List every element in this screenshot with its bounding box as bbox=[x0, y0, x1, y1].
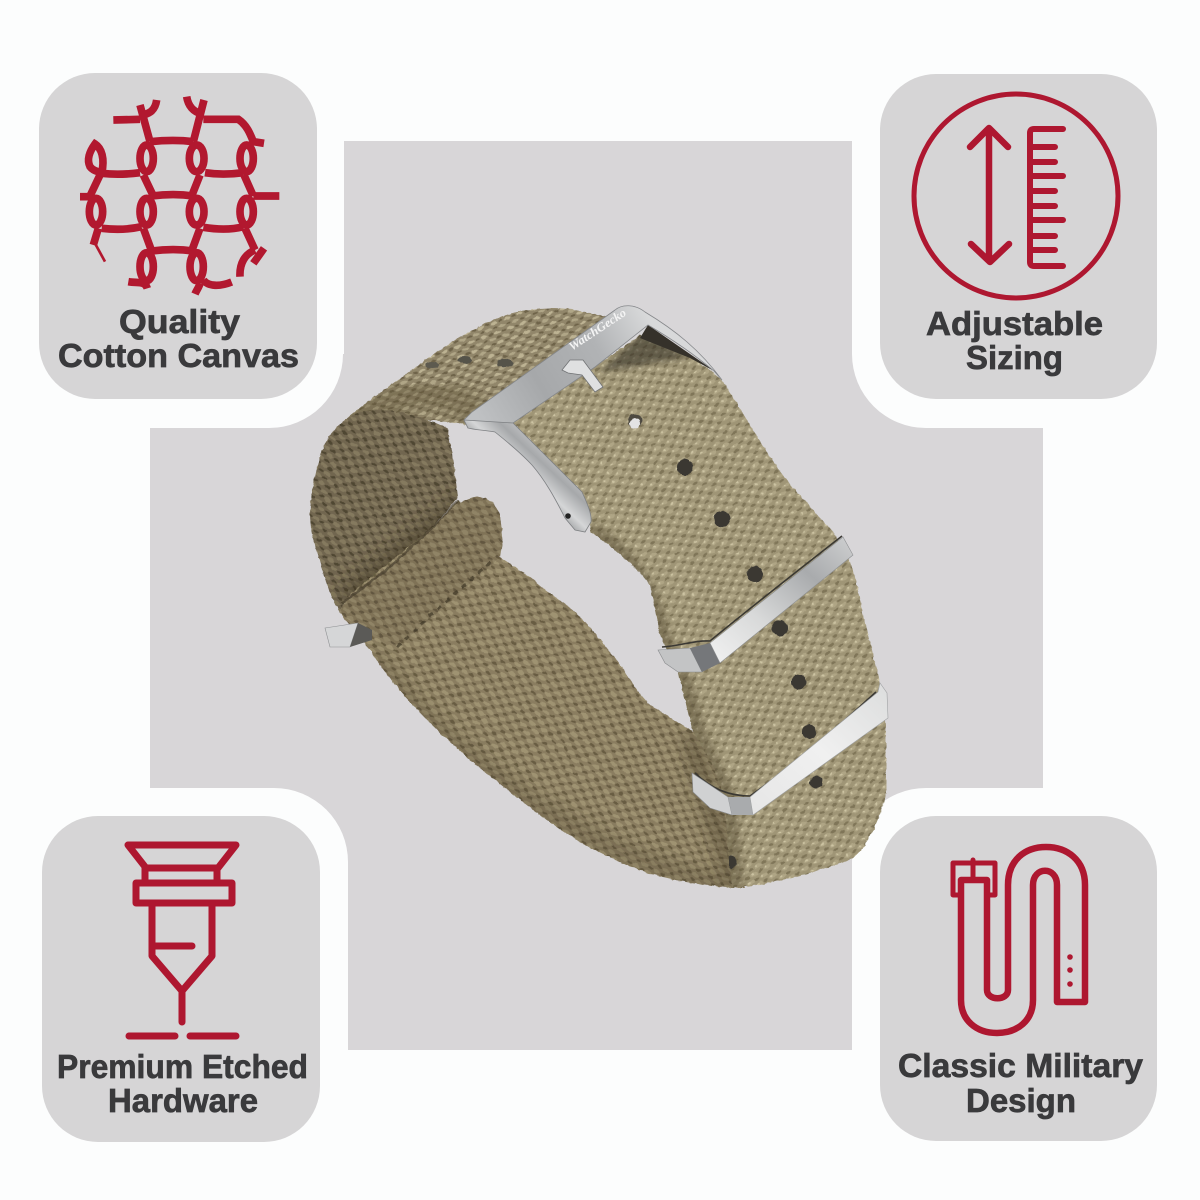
label: Cotton Canvas bbox=[58, 337, 299, 374]
steel buckle bbox=[464, 305, 722, 532]
brand engraving: WatchGecko bbox=[566, 305, 629, 354]
buckle frame top bar bbox=[464, 306, 722, 428]
label bbox=[57, 1048, 308, 1119]
strap inner loop bbox=[310, 410, 458, 613]
central grey cross panel bbox=[150, 141, 1043, 1050]
label bbox=[926, 305, 1103, 376]
card background bbox=[880, 816, 1157, 1141]
woven fabric bbox=[300, 300, 895, 895]
label: Premium Etched bbox=[57, 1048, 308, 1085]
label bbox=[58, 303, 299, 374]
small left keeper bbox=[325, 623, 372, 647]
label: Design bbox=[966, 1082, 1076, 1119]
label: Hardware bbox=[108, 1082, 258, 1119]
flap crease and stitching bbox=[342, 500, 493, 647]
icon: laser etcher bbox=[128, 845, 236, 1036]
card background bbox=[42, 816, 320, 1142]
label: Sizing bbox=[966, 339, 1063, 376]
shadow under buckle bbox=[640, 325, 716, 372]
icon: adjustable arrow and ruler bbox=[914, 94, 1118, 298]
card background bbox=[39, 73, 317, 399]
panel: premium etched hardware bbox=[42, 816, 320, 1142]
icon: folded strap bbox=[953, 847, 1085, 1033]
icon: woven mesh bbox=[80, 97, 279, 294]
panel: classic military design bbox=[880, 816, 1157, 1141]
label: Classic Military bbox=[898, 1047, 1144, 1084]
strap lower band bbox=[335, 490, 755, 895]
panel: quality cotton canvas bbox=[39, 73, 317, 399]
buckle frame side arm bbox=[464, 420, 591, 532]
keeper two bbox=[692, 683, 888, 815]
strap right band bbox=[505, 325, 895, 895]
strap fold flap bbox=[340, 496, 503, 646]
label: Adjustable bbox=[926, 305, 1103, 342]
product: canvas watch strap bbox=[300, 300, 895, 895]
buckle tongue bbox=[562, 360, 603, 392]
card background bbox=[880, 74, 1157, 399]
label bbox=[898, 1047, 1144, 1119]
panel: adjustable sizing bbox=[880, 74, 1157, 399]
strap holes bbox=[628, 414, 822, 868]
buckle pin bbox=[565, 513, 571, 519]
label: Quality bbox=[119, 303, 241, 340]
back strap band bbox=[345, 308, 606, 426]
keeper one bbox=[658, 536, 853, 672]
